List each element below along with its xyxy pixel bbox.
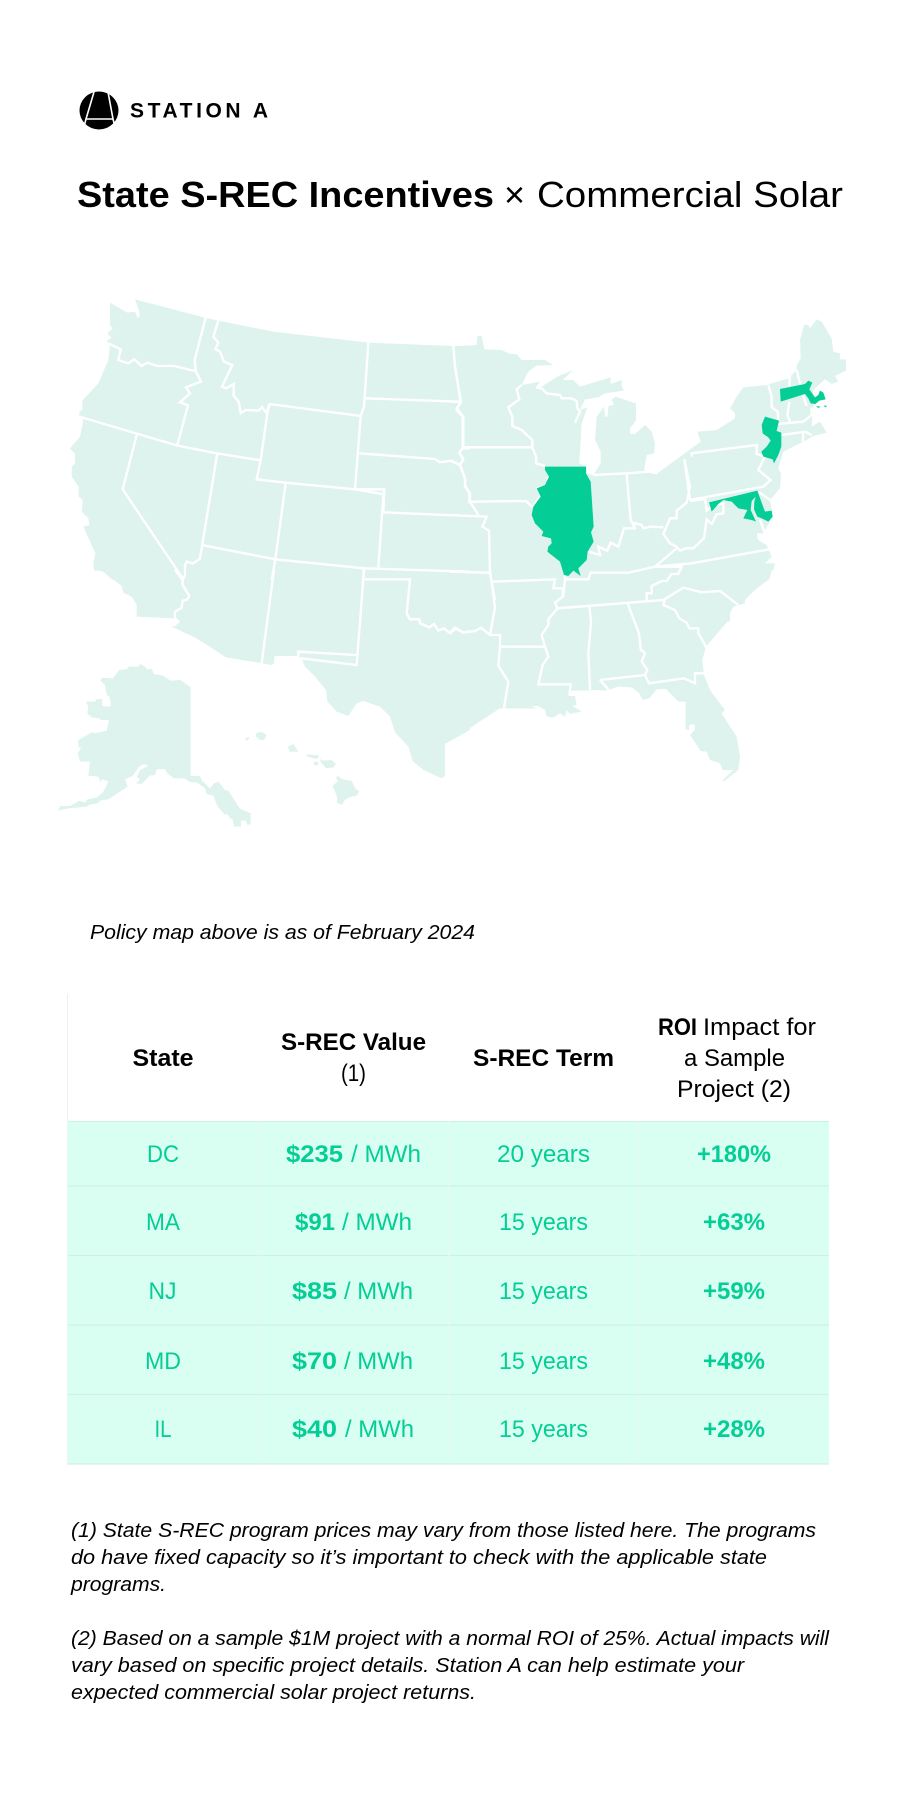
row: NJ: [148, 1278, 765, 1305]
state borders: southeast: [450, 570, 738, 708]
row: IL: / MWh: [345, 1416, 414, 1443]
header: S-REC Value: [281, 1029, 426, 1087]
row: NJ: NJ: [148, 1278, 176, 1305]
row: MD: [145, 1348, 765, 1375]
row: DC: $235: [286, 1141, 343, 1168]
table header row: [67, 994, 816, 1121]
footnote 2: vary based on specific project details. Station A can help estimate your: [71, 1655, 745, 1677]
footnotes: [70, 1520, 830, 1704]
row: DC: +180%: [697, 1141, 771, 1168]
state borders: midwest and northeast: [450, 346, 812, 600]
map note: Policy map above is as of February 2024: [90, 922, 475, 944]
land: eastern states: [450, 319, 846, 600]
footnote 2: (2) Based on a sample $1M project with a normal ROI of 25%. Actual impacts will: [71, 1628, 830, 1650]
state: New Jersey: [761, 417, 781, 463]
header: S-REC Value: (1): [341, 1060, 366, 1087]
header: ROI Impact: Project (2): [677, 1076, 791, 1103]
row: MD: $70: [292, 1348, 337, 1375]
icon: logo mark: [80, 92, 118, 130]
row: NJ: $85: [292, 1278, 337, 1305]
row: MA: [146, 1209, 765, 1236]
row: MD: MD: [145, 1348, 181, 1375]
row: MA: MA: [146, 1209, 180, 1236]
land: western states: [70, 299, 470, 580]
highlighted S-REC states: [532, 381, 827, 576]
row: MA: +63%: [703, 1209, 765, 1236]
title: Commercial Solar: [537, 174, 843, 215]
state borders: west: [79, 318, 470, 580]
logo wordmark: STATION A: [130, 100, 268, 122]
footnote 1: [70, 1520, 816, 1596]
land: Hawaii: [245, 732, 359, 805]
title: ×: [504, 174, 525, 215]
land: Alaska: [58, 664, 251, 827]
footnote 2: expected commercial solar project returns.: [71, 1682, 476, 1704]
footnote 1: programs.: [70, 1574, 166, 1596]
row: DC: / MWh: [351, 1141, 421, 1168]
map: United States S-REC policy map: [58, 299, 846, 827]
row: IL: +28%: [703, 1416, 765, 1443]
header: State: State: [132, 1045, 194, 1072]
table: state S-REC incentives: [67, 994, 829, 1464]
table body background: [67, 1121, 829, 1464]
row: MD: +48%: [703, 1348, 765, 1375]
header: S-REC Term: S-REC Term: [473, 1045, 614, 1072]
state: Maryland: [709, 491, 773, 522]
header: ROI Impact: ROI: [658, 1014, 697, 1041]
footnote 1: (1) State S-REC program prices may vary from those listed here. The programs: [71, 1520, 816, 1542]
state borders: southwest: [173, 570, 470, 665]
land: southeast states: [450, 570, 772, 782]
header: ROI Impact: [658, 1014, 816, 1103]
row: DC: DC: [147, 1141, 179, 1168]
header: ROI Impact: Impact for: [703, 1014, 816, 1041]
state: Massachusetts: [780, 381, 827, 408]
header: ROI Impact: a Sample: [684, 1045, 785, 1072]
row: MA: $91: [295, 1209, 335, 1236]
row: MD: / MWh: [344, 1348, 413, 1375]
land: southwest states: [95, 570, 470, 778]
header: S-REC Value: S-REC Value: [281, 1029, 426, 1056]
footnote 2: [71, 1628, 830, 1704]
row: DC: 20 years: [497, 1141, 590, 1168]
footnote 1: do have fixed capacity so it’s important to check with the applicable state: [71, 1547, 767, 1569]
row: DC: [147, 1141, 771, 1168]
title: State S-REC Incentives: [77, 174, 494, 215]
row: IL: 15 years: [499, 1416, 588, 1443]
row: IL: $40: [292, 1416, 337, 1443]
row: IL: IL: [154, 1416, 172, 1443]
logo: Station A: [80, 92, 268, 130]
title: [77, 174, 843, 215]
row: NJ: +59%: [703, 1278, 765, 1305]
row: IL: [154, 1416, 765, 1443]
row: NJ: 15 years: [499, 1278, 588, 1305]
state: Illinois: [532, 467, 594, 576]
row: MA: 15 years: [499, 1209, 588, 1236]
row: MA: / MWh: [342, 1209, 412, 1236]
row: NJ: / MWh: [344, 1278, 413, 1305]
row: MD: 15 years: [499, 1348, 588, 1375]
